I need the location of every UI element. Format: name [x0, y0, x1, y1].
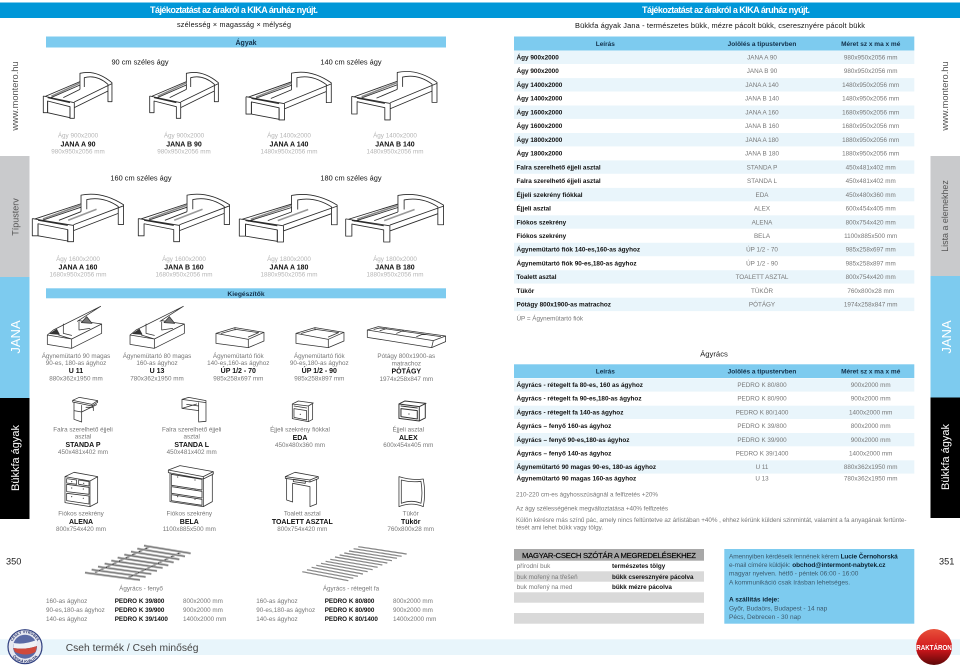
table: slatted bases and storage: Méret sz x ma x mé — [841, 368, 901, 375]
table: beds and accessories: 1680x950x2056 mm — [842, 109, 899, 116]
slatted base: plywood — [302, 547, 407, 592]
table: beds and accessories: 450x481x402 mm — [846, 164, 896, 171]
bottom strip — [0, 639, 960, 655]
item: UP 1/2 - 70: 140-es,160-as ágyhoz — [207, 360, 269, 367]
section heading: beds — [46, 36, 446, 48]
item: STANDA P — [53, 397, 113, 456]
bed: JANA A 90 — [43, 72, 112, 156]
heading: 180 cm beds: 180 cm széles ágy — [320, 174, 382, 182]
contact info box: A szállítás ideje: — [729, 597, 779, 604]
list: plywood base models: 800x2000 mm — [393, 598, 433, 605]
item: UP 1/2 - 90: 90-es,180-as ágyhoz — [290, 360, 349, 367]
table: slatted bases and storage: Leírás — [596, 368, 615, 375]
bed: JANA A 160: Ágy 1600x2000 — [56, 254, 100, 263]
dictionary table: MAGYAR-CSECH SZÓTÁR A MEGREDELÉSEKHEZ — [522, 551, 696, 560]
table: beds and accessories: Ágy 1400x2000 — [516, 80, 563, 89]
bed: JANA B 90 — [150, 72, 218, 156]
table: beds and accessories: JANA B 90 — [747, 68, 778, 75]
item: U 13: U 13 — [150, 368, 164, 375]
table: beds and accessories: TOALETT ASZTAL — [736, 274, 789, 281]
item: BELA — [163, 466, 216, 533]
table: slatted bases and storage: Ágyrács - rétegelt fa 80-es, 160 as ágyhoz — [516, 380, 643, 389]
item: TOALETT ASZTAL: Toalett asztal — [284, 511, 321, 518]
section heading: accessories — [46, 288, 446, 298]
item: STANDA P: STANDA P — [66, 442, 101, 449]
bed: JANA B 160: 1680x950x2056 mm — [155, 271, 213, 278]
bed: JANA A 180 — [239, 194, 337, 278]
bed: JANA A 140: 1480x950x2056 mm — [260, 149, 318, 156]
item: mirror: 760x800x28 mm — [387, 526, 434, 533]
table: beds and accessories: Éjjeli asztal — [516, 204, 551, 212]
bed: JANA B 180: 1880x950x2056 mm — [366, 271, 424, 278]
badge: Czech product stamp — [7, 629, 43, 664]
item: POTAGY: PÓTÁGY — [392, 367, 421, 376]
list: pine base models: PEDRO K 39/800 — [115, 598, 165, 605]
item: mirror — [387, 477, 434, 533]
table: beds and accessories: Toalett asztal — [516, 274, 557, 281]
bed: JANA B 180: JANA B 180 — [375, 265, 415, 272]
table: beds and accessories: JANA A 140 — [745, 82, 779, 89]
item: ALENA: 800x754x420 mm — [56, 526, 106, 533]
table: beds and accessories: Ágy 900x2000 — [516, 66, 559, 75]
slatted base: pine: Ágyrács - fenyő — [119, 584, 163, 592]
table: slatted bases and storage: Ágyrács - rétegelt fa 90-es,180-as ágyhoz — [516, 394, 642, 402]
list: plywood base models: 90-es,180-as ágyhoz — [256, 607, 315, 614]
item: TOALETT ASZTAL: TOALETT ASZTAL — [272, 519, 333, 526]
table: slatted bases and storage: Ágyrács – fenyő 160-as ágyhoz — [516, 421, 611, 430]
item: UP 1/2 - 90: Ágynemütartó fiók — [294, 351, 346, 360]
item: UP 1/2 - 70: 985x258x697 mm — [213, 375, 263, 382]
table: beds and accessories: ALEX — [754, 206, 771, 212]
right side tabs: Lista a elemekhez — [940, 180, 950, 252]
pricing notes — [516, 492, 906, 532]
top banner: left page: Tájékoztatást az árakról a KIKA áruház nyújt. — [150, 5, 318, 15]
list: pine base models: 900x2000 mm — [183, 607, 223, 614]
table: beds and accessories: 1880x950x2056 mm — [842, 151, 899, 158]
table: beds and accessories: Éjjeli szekrény fiókkal — [516, 190, 583, 199]
right side tabs: Bükkfa ágyak — [940, 423, 952, 490]
table: beds and accessories: Ágy 1600x2000 — [516, 107, 563, 116]
bed: JANA B 140: 1480x950x2056 mm — [366, 149, 424, 156]
bed: JANA A 180: JANA A 180 — [270, 265, 309, 272]
table: beds and accessories: 980x950x2056 mm — [844, 68, 897, 75]
item: POTAGY: Pótágy 800x1900-as — [377, 353, 435, 360]
table: slatted bases and storage: 880x362x1950 mm — [844, 464, 897, 471]
list: pine base models: PEDRO K 39/1400 — [115, 616, 168, 623]
table: slatted bases and storage: PEDRO K 39/800 — [737, 423, 787, 430]
table: beds and accessories: Tükör — [516, 288, 535, 295]
item: U 13: 780x362x1950 mm — [130, 375, 184, 382]
bed: JANA B 180: Ágy 1800x2000 — [373, 254, 417, 263]
heading: 140 cm beds: 140 cm széles ágy — [320, 58, 382, 66]
list: pine base models: 160-as ágyhoz — [46, 598, 87, 605]
item: STANDA L — [162, 397, 221, 456]
item: ALENA: Fiókos szekrény — [58, 511, 105, 518]
item: UP 1/2 - 70: ÚP 1/2 - 70 — [221, 366, 256, 375]
item: UP 1/2 - 90 — [290, 328, 349, 382]
table: slatted bases and storage: Ágyrács – fenyő 90-es,180-as ágyhoz — [516, 435, 629, 444]
dictionary table: přírodní buk — [517, 563, 551, 570]
table: slatted bases and storage: 1400x2000 mm — [849, 410, 892, 416]
table: slatted bases and storage: Ágyrács – fenyő 140-as ágyhoz — [516, 448, 611, 458]
table: slatted bases and storage: PEDRO K 80/1400 — [736, 410, 789, 416]
table: slatted bases and storage: 900x2000 mm — [851, 437, 891, 444]
bed: JANA B 160: Ágy 1600x2000 — [162, 254, 206, 263]
item: U 11: Ágynemütartó 90 magas — [42, 351, 110, 360]
item: UP 1/2 - 90: ÚP 1/2 - 90 — [302, 366, 337, 375]
table: beds and accessories: Ágy 1600x2000 — [516, 121, 563, 130]
table: beds and accessories: 1480x950x2056 mm — [842, 82, 899, 89]
table: beds and accessories: Falra szerelhető éjjeli asztal — [516, 178, 601, 185]
table: beds and accessories: ÚP 1/2 - 70 — [746, 245, 778, 254]
item: POTAGY — [367, 327, 446, 383]
top banner: left page — [0, 2, 480, 18]
table: slatted bases and storage: PEDRO K 80/900 — [737, 396, 787, 402]
table: beds and accessories: Méret sz x ma x mé — [841, 41, 901, 48]
list: plywood base models: 160-as ágyhoz — [256, 598, 298, 605]
table: beds and accessories: 760x800x28 mm — [847, 288, 894, 295]
item: STANDA P: asztal — [75, 434, 91, 440]
bed: JANA B 90: Ágy 900x2000 — [164, 131, 205, 140]
item: POTAGY: matrachoz — [392, 361, 421, 368]
table: beds and accessories: 985x258x697 mm — [846, 247, 896, 254]
list: plywood base models: 140-es ágyhoz — [256, 616, 298, 623]
list: plywood base models: PEDRO K 80/900 — [325, 607, 375, 614]
bed: JANA A 160: JANA A 160 — [59, 265, 98, 272]
item: TOALETT ASZTAL — [272, 472, 333, 533]
item: STANDA P: Falra szerelhető éjjeli — [53, 427, 113, 434]
list: pine base models: 800x2000 mm — [183, 598, 223, 605]
bed: JANA A 180: 1880x950x2056 mm — [260, 271, 318, 278]
list: plywood base models — [256, 598, 436, 623]
table: beds and accessories — [514, 36, 914, 311]
table: slatted bases and storage: 900x2000 mm — [851, 382, 891, 389]
table: beds and accessories: 1680x950x2056 mm — [842, 123, 899, 130]
table: beds and accessories: Falra szerelhető éjjeli asztal — [516, 164, 601, 171]
bed: JANA B 160: JANA B 160 — [164, 265, 204, 272]
pricing notes: 210-220 cm-es ágyhosszúságnál a felfizetés +20% — [516, 492, 658, 498]
table: beds and accessories: 800x754x420 mm — [846, 274, 896, 281]
table: beds and accessories: JANA B 160 — [745, 123, 779, 130]
bed: JANA A 90: 980x950x2056 mm — [51, 149, 105, 156]
table: beds and accessories: ALENA — [752, 219, 773, 226]
item: ALEX: 600x454x405 mm — [383, 442, 433, 449]
table: beds and accessories: 1880x950x2056 mm — [842, 137, 899, 144]
table: slatted bases and storage: 780x362x1950 mm — [844, 476, 897, 482]
subtitle: dimensions order: szélesség × magasság × mélység — [177, 20, 291, 29]
page number left: 350 — [6, 556, 21, 566]
bottom strip: Cseh termék / Cseh minőség — [66, 643, 199, 654]
bed: JANA A 160: 1680x950x2056 mm — [49, 271, 107, 278]
table: beds and accessories: PÓTÁGY — [749, 300, 776, 309]
table: beds and accessories: 600x454x405 mm — [846, 206, 896, 212]
item: ALEX: Éjjeli asztal — [393, 425, 424, 434]
item: U 11: 880x362x1950 mm — [49, 375, 103, 382]
table: beds and accessories: Leírás — [596, 41, 615, 48]
table: slatted bases and storage: Jolölés a tipustervben — [728, 368, 796, 375]
item: mirror: Tükör — [401, 519, 421, 526]
list: pine base models: 140-es ágyhoz — [46, 616, 87, 623]
table: beds and accessories: JANA B 180 — [745, 151, 779, 158]
dictionary table — [514, 549, 704, 624]
item: ALENA — [56, 472, 106, 533]
bed: JANA B 90: JANA B 90 — [166, 142, 202, 149]
table: slatted bases and storage: 900x2000 mm — [851, 396, 891, 402]
bed: JANA A 180: Ágy 1800x2000 — [267, 254, 311, 263]
list: pine base models: 1400x2000 mm — [183, 616, 226, 623]
table: beds and accessories: Ágy 1800x2000 — [516, 149, 563, 158]
right side tabs: www.montero.hu — [940, 61, 950, 132]
item: U 13: Ágynemütartó 80 magas — [123, 351, 191, 360]
table: slatted bases and storage: PEDRO K 39/1400 — [736, 450, 789, 458]
table: beds and accessories: JANA B 140 — [745, 96, 779, 103]
badge: Czech product stamp: ČESKÝ VÝROBEK — [10, 630, 40, 642]
item: U 11: U 11 — [69, 368, 83, 375]
item: ALEX: ALEX — [399, 435, 418, 442]
item: EDA: 450x480x360 mm — [275, 442, 325, 449]
item: EDA: Éjjeli szekrény fiókkal — [270, 425, 330, 434]
slatted base: plywood: Ágyrács - rétegelt fa — [323, 584, 380, 592]
table: beds and accessories: EDA — [756, 192, 769, 199]
item: mirror: Tükör — [403, 511, 419, 518]
table: beds and accessories: 1974x258x847 mm — [844, 302, 897, 309]
page number right: 351 — [939, 556, 954, 566]
bed: JANA B 140 — [352, 71, 437, 156]
contact info box: A kommunikáció csak írásban lehetséges. — [729, 579, 850, 586]
table footnote: ÚP = Ágynemütartó fiók — [516, 313, 584, 322]
item: STANDA L: 450x481x402 mm — [167, 449, 217, 456]
table: beds and accessories: Pótágy 800x1900-as matrachoz — [516, 302, 611, 309]
item: BELA: 1100x885x500 mm — [163, 526, 216, 533]
left side tabs: JANA — [8, 320, 23, 354]
item: U 13: 160-as ágyhoz — [136, 360, 178, 367]
section heading: beds: Ágyak — [235, 38, 257, 47]
heading: 90 cm beds: 90 cm széles ágy — [111, 58, 169, 66]
item: POTAGY: 1974x258x847 mm — [380, 376, 433, 383]
item: STANDA L: STANDA L — [174, 442, 210, 449]
bed: JANA A 160 — [32, 194, 124, 278]
table: slatted bases and storage: PEDRO K 80/800 — [737, 382, 787, 389]
table: slatted bases and storage: 1400x2000 mm — [849, 450, 892, 458]
table: beds and accessories: 985x258x897 mm — [846, 260, 896, 268]
badge: in stock — [916, 629, 952, 665]
dictionary table: természetes tölgy — [612, 563, 666, 570]
table: slatted bases and storage — [514, 364, 914, 482]
badge: Czech product stamp: ČESKÁ KVALITA — [12, 655, 38, 663]
bed: JANA A 140: JANA A 140 — [270, 142, 309, 149]
list: pine base models: 90-es,180-as ágyhoz — [46, 607, 105, 614]
list: plywood base models: PEDRO K 80/800 — [325, 598, 375, 605]
right side tabs: JANA — [939, 320, 954, 354]
list: plywood base models: 1400x2000 mm — [393, 616, 436, 623]
table: slatted bases and storage: U 11 — [756, 464, 769, 471]
table: beds and accessories: BELA — [754, 233, 771, 240]
table: beds and accessories: JANA A 180 — [745, 137, 779, 144]
subtitle: wood finishes: Bükkfa ágyak Jana - természetes bükk, mézre pácolt bükk, cseresznyére pácolt bükk — [575, 21, 865, 30]
section heading: accessories: Kiegészítők — [227, 291, 265, 298]
bed: JANA B 180 — [346, 194, 444, 278]
list: pine base models — [46, 598, 226, 623]
bed: JANA A 140 — [246, 72, 331, 156]
table: beds and accessories: STANDA L — [747, 178, 777, 185]
dictionary table: bükk cseresznyére pácolva — [612, 574, 694, 581]
left side tabs — [0, 61, 30, 519]
item: STANDA P: 450x481x402 mm — [58, 449, 108, 456]
table: slatted bases and storage: PEDRO K 39/900 — [737, 437, 787, 444]
item: UP 1/2 - 70: Ágynemütartó fiók — [213, 351, 265, 360]
item: U 13 — [123, 306, 191, 382]
item: UP 1/2 - 90: 985x258x897 mm — [294, 375, 344, 382]
table: slatted bases and storage: Ágynemütartó 90 magas 90-es, 180-as ágyhoz — [516, 462, 656, 471]
left side tabs: Bükkfa ágyak — [10, 424, 22, 491]
table: slatted bases and storage: Ágyrács - rétegelt fa 140-as ágyhoz — [516, 408, 623, 416]
table: beds and accessories: Fiókos szekrény — [516, 219, 567, 226]
badge: in stock: RAKTÁRON — [916, 643, 952, 652]
table: slatted bases and storage: 800x2000 mm — [851, 423, 891, 430]
table: beds and accessories: 450x480x360 mm — [846, 192, 896, 199]
item: ALENA: ALENA — [69, 519, 93, 526]
item: BELA: Fiókos szekrény — [167, 511, 213, 518]
table: slatted bases and storage: Ágynemütartó 90 magas 160-as ágyhoz — [516, 474, 636, 482]
pricing notes: Külön kérésre más színű pác, amely nincs feltüntetve az árlistában +40% , ehhez kérünk küldeni szinmintát, valamint a fa anyagának fertünte- — [516, 517, 906, 524]
item: BELA: BELA — [180, 519, 199, 526]
item: TOALETT ASZTAL: 800x754x420 mm — [277, 526, 327, 533]
pricing notes: Az ágy szélességének megváltoztatása +40% felfizetés — [516, 506, 668, 512]
dictionary table: buk mořený na med — [517, 584, 573, 591]
bed: JANA A 140: Ágy 1400x2000 — [267, 131, 311, 140]
dictionary table: bükk mézre pácolva — [612, 584, 672, 591]
item: STANDA L: Falra szerelhető éjjeli — [162, 427, 221, 434]
table: beds and accessories: STANDA P — [747, 164, 777, 171]
right side tabs — [930, 61, 960, 518]
item: U 11: 90-es, 180-as ágyhoz — [46, 360, 106, 367]
table: beds and accessories: Ágy 900x2000 — [516, 52, 559, 62]
bed: JANA B 140: JANA B 140 — [375, 142, 415, 149]
table: beds and accessories: Ágynemütartó fiók 140-es,160-as ágyhoz — [516, 245, 640, 254]
list: plywood base models: PEDRO K 80/1400 — [325, 616, 378, 623]
contact info box: Győr, Budaörs, Budapest - 14 nap — [729, 605, 828, 612]
bed: JANA B 140: Ágy 1400x2000 — [373, 131, 417, 140]
table: beds and accessories: TÜKÖR — [751, 287, 773, 295]
bed: JANA A 90: Ágy 900x2000 — [58, 131, 99, 140]
table: beds and accessories: JANA A 90 — [747, 54, 777, 62]
table: beds and accessories: Ágy 1800x2000 — [516, 135, 563, 144]
table: beds and accessories: 450x481x402 mm — [846, 178, 896, 185]
table: slatted bases and storage: U 13 — [755, 476, 769, 482]
table: beds and accessories: ÚP 1/2 - 90 — [746, 258, 778, 268]
item: U 11 — [42, 306, 110, 382]
table: beds and accessories: JANA A 160 — [745, 109, 779, 116]
left side tabs: Típusterv — [10, 198, 20, 236]
pricing notes: tését ami lehet bükk vagy tölgy. — [516, 524, 603, 532]
left side tabs: www.montero.hu — [10, 61, 20, 132]
contact info box: magyar nyelven. hétfő - péntek 06:00 - 16:00 — [729, 571, 859, 578]
list: pine base models: PEDRO K 39/900 — [115, 607, 165, 614]
heading: slatted bases: Ágyrács — [700, 349, 728, 358]
table: beds and accessories: Jolölés a tipustervben — [728, 41, 796, 48]
table: beds and accessories: Ágy 1400x2000 — [516, 94, 563, 103]
table: beds and accessories: Fiókos szekrény — [516, 233, 567, 240]
top banner: right page: Tájékoztatást az árakról a KIKA áruház nyújt. — [642, 5, 810, 15]
contact info box: e-mail címére küldjék: obchod@intermont-nabytek.cz — [729, 562, 886, 569]
contact info box: Pécs, Debrecen - 30 nap — [729, 614, 801, 621]
bed: JANA B 160 — [138, 194, 230, 278]
bed: JANA B 90: 980x950x2056 mm — [157, 149, 211, 156]
item: EDA — [270, 401, 330, 449]
item: EDA: EDA — [293, 435, 307, 442]
slatted base: pine — [85, 546, 191, 592]
item: ALEX — [383, 401, 433, 449]
table: beds and accessories: Ágynemütartó fiók 90-es,180-as ágyhoz — [516, 258, 637, 268]
table: beds and accessories: 1480x950x2056 mm — [842, 96, 899, 103]
contact info box: Amennyiben kérdéseik lennének kérem Lucie Černohorská — [729, 551, 898, 560]
dictionary table: buk mořený na třešeň — [517, 574, 578, 581]
table: beds and accessories: 800x754x420 mm — [846, 219, 896, 226]
top banner: right page — [480, 2, 960, 18]
item: UP 1/2 - 70 — [207, 328, 269, 382]
bed: JANA A 90: JANA A 90 — [60, 142, 96, 149]
list: plywood base models: 900x2000 mm — [393, 607, 433, 614]
contact info box — [724, 549, 914, 624]
item: STANDA L: asztal — [183, 434, 200, 440]
table: beds and accessories: 1100x885x500 mm — [844, 233, 897, 240]
table: beds and accessories: 980x950x2056 mm — [844, 54, 897, 62]
heading: 160 cm beds: 160 cm széles ágy — [110, 174, 172, 182]
